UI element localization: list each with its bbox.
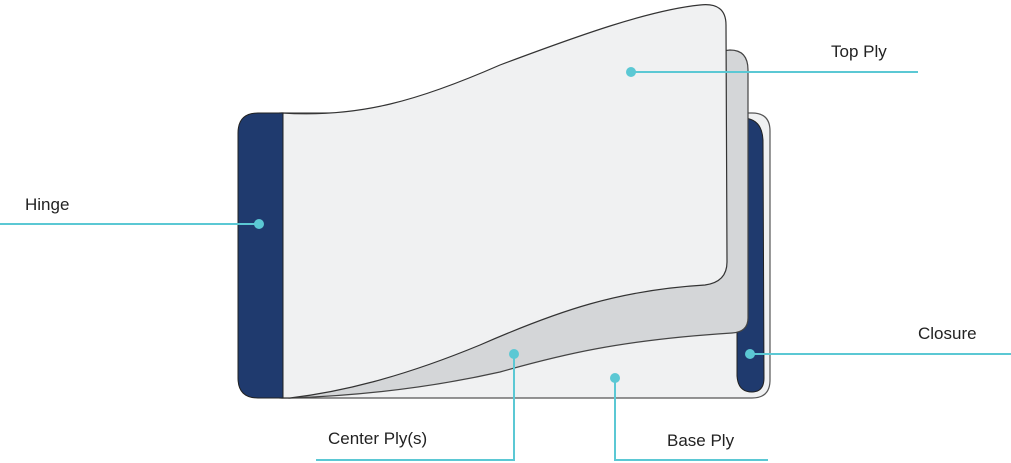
- callout: closure: Closure: [918, 324, 977, 343]
- callout: base ply: [610, 373, 768, 460]
- closure: [737, 118, 764, 392]
- top ply: [282, 5, 727, 398]
- callout: hinge: Hinge: [25, 195, 69, 214]
- callout: center ply: Center Ply(s): [328, 429, 427, 448]
- hinge: [238, 113, 283, 398]
- center ply: [290, 50, 748, 398]
- base ply: [280, 113, 770, 398]
- callout: base ply: Base Ply: [667, 431, 735, 450]
- callout: center ply: [316, 349, 519, 460]
- callout: top ply: Top Ply: [831, 42, 887, 61]
- callout: top ply: [626, 42, 918, 77]
- callout: closure: [745, 324, 1011, 359]
- callout: hinge: [0, 195, 264, 229]
